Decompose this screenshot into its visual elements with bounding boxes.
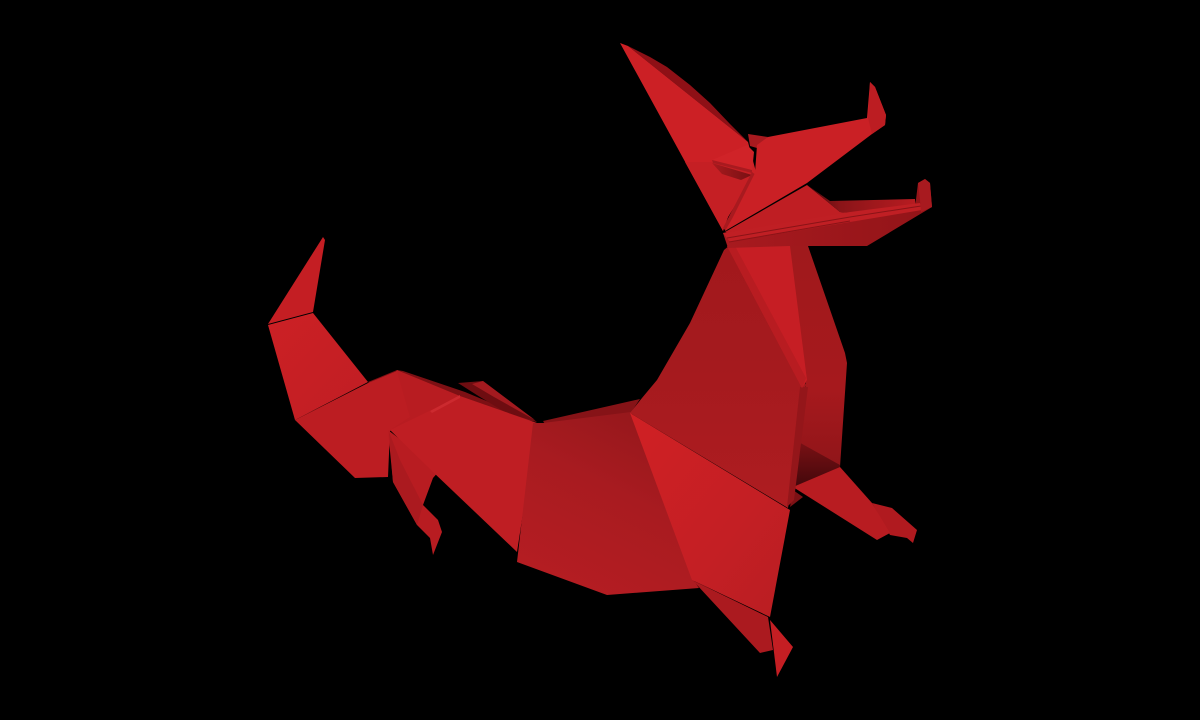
eye flap	[712, 145, 754, 172]
snout fold strip	[723, 172, 757, 231]
ear	[620, 43, 756, 231]
neck fold strip	[727, 246, 806, 388]
top knot	[748, 134, 768, 148]
ear back	[628, 46, 748, 142]
rear leg	[388, 430, 442, 555]
foreleg	[692, 580, 773, 653]
shoulder flap	[630, 413, 790, 617]
rear foot and leg	[790, 467, 917, 543]
hip	[390, 396, 537, 552]
flap shadow	[712, 163, 752, 180]
back sliver	[543, 399, 640, 424]
ear lower tone	[685, 162, 752, 231]
lower jaw	[723, 179, 932, 248]
jaw fold lines	[727, 206, 921, 242]
belly	[517, 412, 699, 595]
chest fold edge	[787, 387, 808, 507]
dark hollow behind chest	[793, 440, 840, 490]
neck front	[727, 246, 807, 388]
front foot	[770, 620, 793, 677]
tail	[268, 237, 537, 478]
upper snout	[725, 82, 886, 231]
eye flap lower fold	[712, 160, 752, 173]
neck back	[788, 246, 847, 487]
chest	[630, 245, 806, 508]
snout tip	[868, 82, 886, 134]
hip lit edge	[430, 395, 460, 413]
